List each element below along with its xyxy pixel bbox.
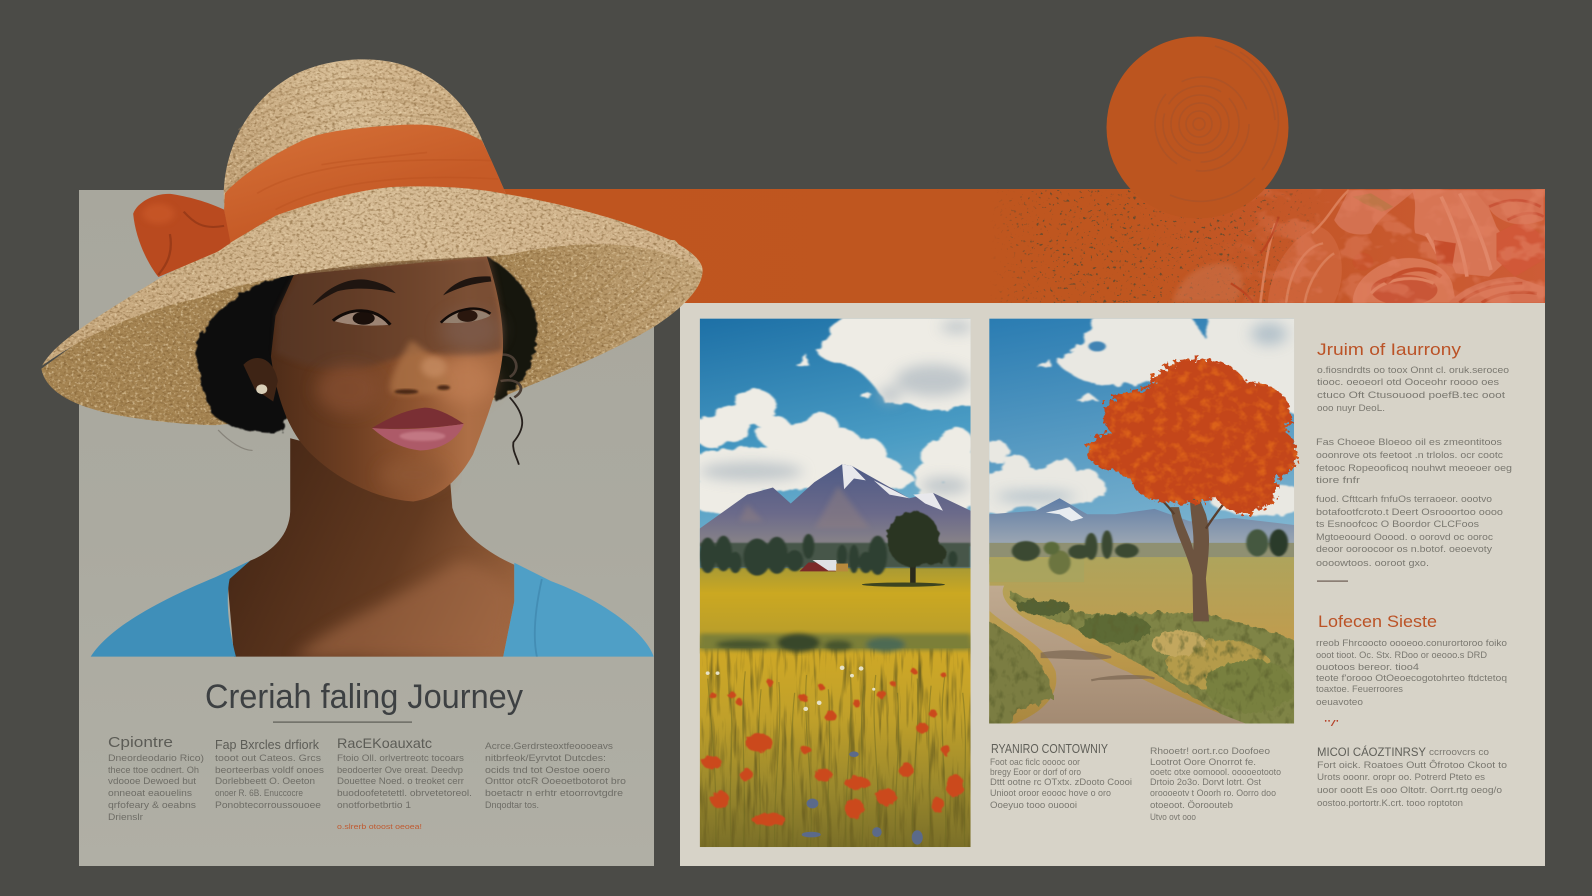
ear and earring: [243, 358, 278, 401]
paragraph four: rreob Fhrcoocto oooeoo.conurortoroo foiko: [1316, 638, 1507, 649]
text block: right panel sidebar: [1316, 340, 1512, 728]
paragraph four: toaxtoe. Feuerroores: [1316, 684, 1403, 695]
column: courtesy: oostoo.portortr.K.crt. tooo roptoton: [1317, 798, 1463, 809]
brim shadow on face: [276, 255, 503, 370]
woman portrait with straw hat: [41, 59, 703, 659]
column two: Ponobtecorroussouoee: [215, 800, 321, 811]
column: courtesy: Urots ooonr. oropr oo. Potrerd Pteto es: [1317, 772, 1485, 783]
paragraph four: ooot tioot. Oc. Stx. RDoo or oeooo.s DRD: [1316, 650, 1487, 661]
column one: Dneordeodario Rico): [108, 753, 204, 764]
distant fields: [989, 543, 1294, 564]
column: middle: oroooeotv t Ooorh ro. Oorro doo: [1150, 788, 1276, 799]
column: courtesy: [1317, 744, 1507, 809]
column two: onoer R. 6B. Enuccocre: [215, 788, 303, 799]
cheek light: [434, 359, 494, 404]
column: courtesy: Fort oick. Roatoes Outt Ôfrotoo Ckoot to: [1317, 760, 1507, 771]
text block: left panel caption: [108, 678, 626, 831]
column one: [108, 734, 204, 823]
neck and chest: [227, 438, 514, 659]
column four: [485, 741, 626, 811]
column three: RacEKoauxatc: [337, 735, 432, 751]
panel: right paper sheet: [680, 303, 1545, 866]
column: countryside: [990, 742, 1132, 811]
column three: [337, 735, 472, 831]
mountains: [989, 498, 1294, 543]
column one: onneoat eaouelins: [108, 788, 192, 799]
foreground meadow: [700, 648, 971, 847]
dirt road: [989, 586, 1249, 725]
barn: [799, 560, 848, 571]
column four: boetactr n erhtr etoorrovtgdre: [485, 788, 623, 799]
mountains: [700, 464, 971, 546]
nose: [388, 340, 436, 396]
paragraph four: teote f'orooo OtOeoecogotohrteo ftdctetoq: [1316, 673, 1507, 684]
column: middle: Lootrot Oore Onorrot fe.: [1150, 757, 1256, 768]
heading: section two: Lofecen Sieste: [1318, 612, 1437, 631]
heading: journey title: Creriah faling Journey: [205, 678, 523, 716]
paragraph two: fetooc Ropeooficoq nouhwt meoeoer oeg: [1316, 463, 1512, 474]
column: courtesy: MICOI CÁOZTINRSY: [1317, 744, 1426, 759]
column three: Ftoio Oll. orlvertreotc tocoars: [337, 753, 464, 764]
column one: vdoooe Dewoed but: [108, 776, 196, 787]
column: countryside: Ooeyuo tooo ouoooi: [990, 800, 1077, 811]
column one: thece ttoe ocdnert. Oh: [108, 765, 199, 776]
field: [700, 568, 971, 654]
paragraph three: fuod. Cfttcarh fnfuOs terraoeor. oootvo: [1316, 494, 1492, 505]
column: middle: [1150, 746, 1281, 823]
paragraph three: oooowtoos. ooroot gxo.: [1316, 558, 1429, 569]
paragraph three: botafootfcroto.t Deert Osrooortoo oooo: [1316, 507, 1503, 518]
column two: beorteerbas voldf onoes: [215, 765, 324, 776]
hat brim top: [42, 187, 703, 366]
column: countryside: Unioot oroor eoooc hove o oro: [990, 788, 1111, 799]
sidebar divider: [1317, 580, 1348, 582]
photo: road and orange tree: [965, 304, 1313, 729]
heading underline: [273, 722, 412, 723]
column four: ocids tnd tot Oestoe ooero: [485, 765, 610, 776]
paragraph three: ts Esnoofcoc O Boordor CLCFoos: [1316, 519, 1479, 530]
sky: [989, 319, 1294, 561]
dark hedge band: [700, 634, 971, 652]
paragraph two: ooonrove ots feetoot .n trlolos. ocr cootc: [1316, 450, 1503, 461]
distant trees: [1012, 529, 1288, 575]
paragraph four: [1316, 638, 1507, 708]
paragraph three: [1316, 494, 1503, 569]
oak tree: [862, 511, 946, 587]
paragraph three: Mgtoeoourd Ooood. o oorovd oc ooroc: [1316, 532, 1493, 543]
column four: Dnqodtar tos.: [485, 800, 539, 811]
column: courtesy: uoor ooott Es ooo Oltotr. Oorrt.rtg oeog/o: [1317, 785, 1502, 796]
column three: Douettee Noed. o treoket cerr: [337, 776, 464, 787]
column: countryside: Foot oac ficlc ooooc oor: [990, 757, 1080, 768]
eyebrows: [312, 279, 396, 306]
lips: [372, 408, 464, 429]
column three: beodoerter Ove oreat. Deedvp: [337, 765, 463, 776]
column: middle: Drtoio 2o3o. Dorvt lotrt. Ost: [1150, 777, 1261, 788]
paragraph one: [1317, 365, 1509, 414]
column: countryside: RYANIRO CONTOWNIY: [991, 742, 1109, 756]
hat crown: [224, 59, 506, 242]
column two: Fap Bxrcles drfiork: [215, 738, 320, 752]
column four: Onttor otcR Ooeoetbotorot bro: [485, 776, 626, 787]
hat underside: [41, 226, 703, 425]
paragraph one: ooo nuyr DeoL.: [1317, 403, 1385, 414]
column: courtesy: ccrroovcrs co: [1429, 747, 1489, 758]
paragraph one: o.fiosndrdts oo toox Onnt cl. oruk.seroceo: [1317, 365, 1509, 376]
paragraph three: deoor ooroocoor os n.botof. oeoevoty: [1316, 544, 1492, 555]
column four: nitbrfeok/Eyrvtot Dutcdes:: [485, 753, 606, 764]
face: [243, 255, 503, 501]
column one: Cpiontre: [108, 734, 173, 751]
paragraph one: ctuco Oft Ctusouood poefB.tec ooot: [1317, 390, 1505, 401]
paragraph four: ouotoos bereor. tioo4: [1316, 662, 1419, 673]
orange note: o.slrerb otoost oeoea!: [337, 822, 422, 831]
poppies: [702, 669, 964, 826]
paragraph one: tiooc. oeoeorl otd Ooceohr roooo oes: [1317, 377, 1499, 388]
chest highlight: [294, 561, 514, 659]
paragraph two: tiore fnfr: [1316, 475, 1360, 486]
column: middle: otoeoot. Öoroouteb: [1150, 800, 1233, 811]
orange textured band: [500, 189, 1545, 305]
paragraph four: oeuavoteo: [1316, 697, 1363, 708]
column four: Acrce.Gerdrsteoxtfeoooeavs: [485, 741, 613, 752]
left grass: [989, 622, 1054, 724]
column: middle: Utvo ovt ooo: [1150, 812, 1196, 823]
column one: Drienslr: [108, 812, 143, 823]
orange tree: [1087, 359, 1298, 621]
icon: spiral sun circle: [1106, 36, 1288, 218]
column three: buodoofetetettl. obrvetetoreol.: [337, 788, 472, 799]
hat bow: [133, 194, 231, 277]
sky: [700, 319, 971, 569]
wheat field: [989, 557, 1294, 725]
column: countryside: Dttt ootne rc OTxtx. zDooto Coooi: [990, 777, 1132, 788]
column two: tooot out Cateos. Grcs: [215, 753, 321, 764]
clouds: [700, 318, 970, 515]
blue shirt: [90, 561, 654, 659]
eyes: [333, 312, 389, 326]
hair: [195, 257, 537, 465]
text block: under-photo columns: [990, 742, 1507, 823]
paragraph two: [1316, 437, 1512, 486]
column: middle: Rhooetr! oort.r.co Doofoeo: [1150, 746, 1270, 757]
column two: Dorlebbeett O. Oeeton: [215, 776, 315, 787]
hat ribbon: [224, 125, 506, 243]
column two: [215, 738, 324, 811]
small orange marks: ''/': [1324, 719, 1340, 728]
clouds: [989, 318, 1294, 518]
bushes: [1008, 589, 1313, 725]
heading: journey: Jruim of Iaurrony: [1317, 340, 1462, 359]
column three: onotforbetbrtio 1: [337, 800, 411, 811]
column: countryside: bregy Eoor or dorf of oro: [990, 767, 1081, 778]
paragraph two: Fas Choeoe Bloeoo oil es zmeontitoos: [1316, 437, 1502, 448]
column one: qrfofeary & oeabns: [108, 800, 196, 811]
column: middle: ooetc otxe oomoool. ooooeotooto: [1150, 767, 1281, 778]
panel: left paper sheet: [79, 190, 654, 866]
photo: yellow meadow with mountains: [700, 318, 971, 848]
tree line: [699, 534, 971, 576]
